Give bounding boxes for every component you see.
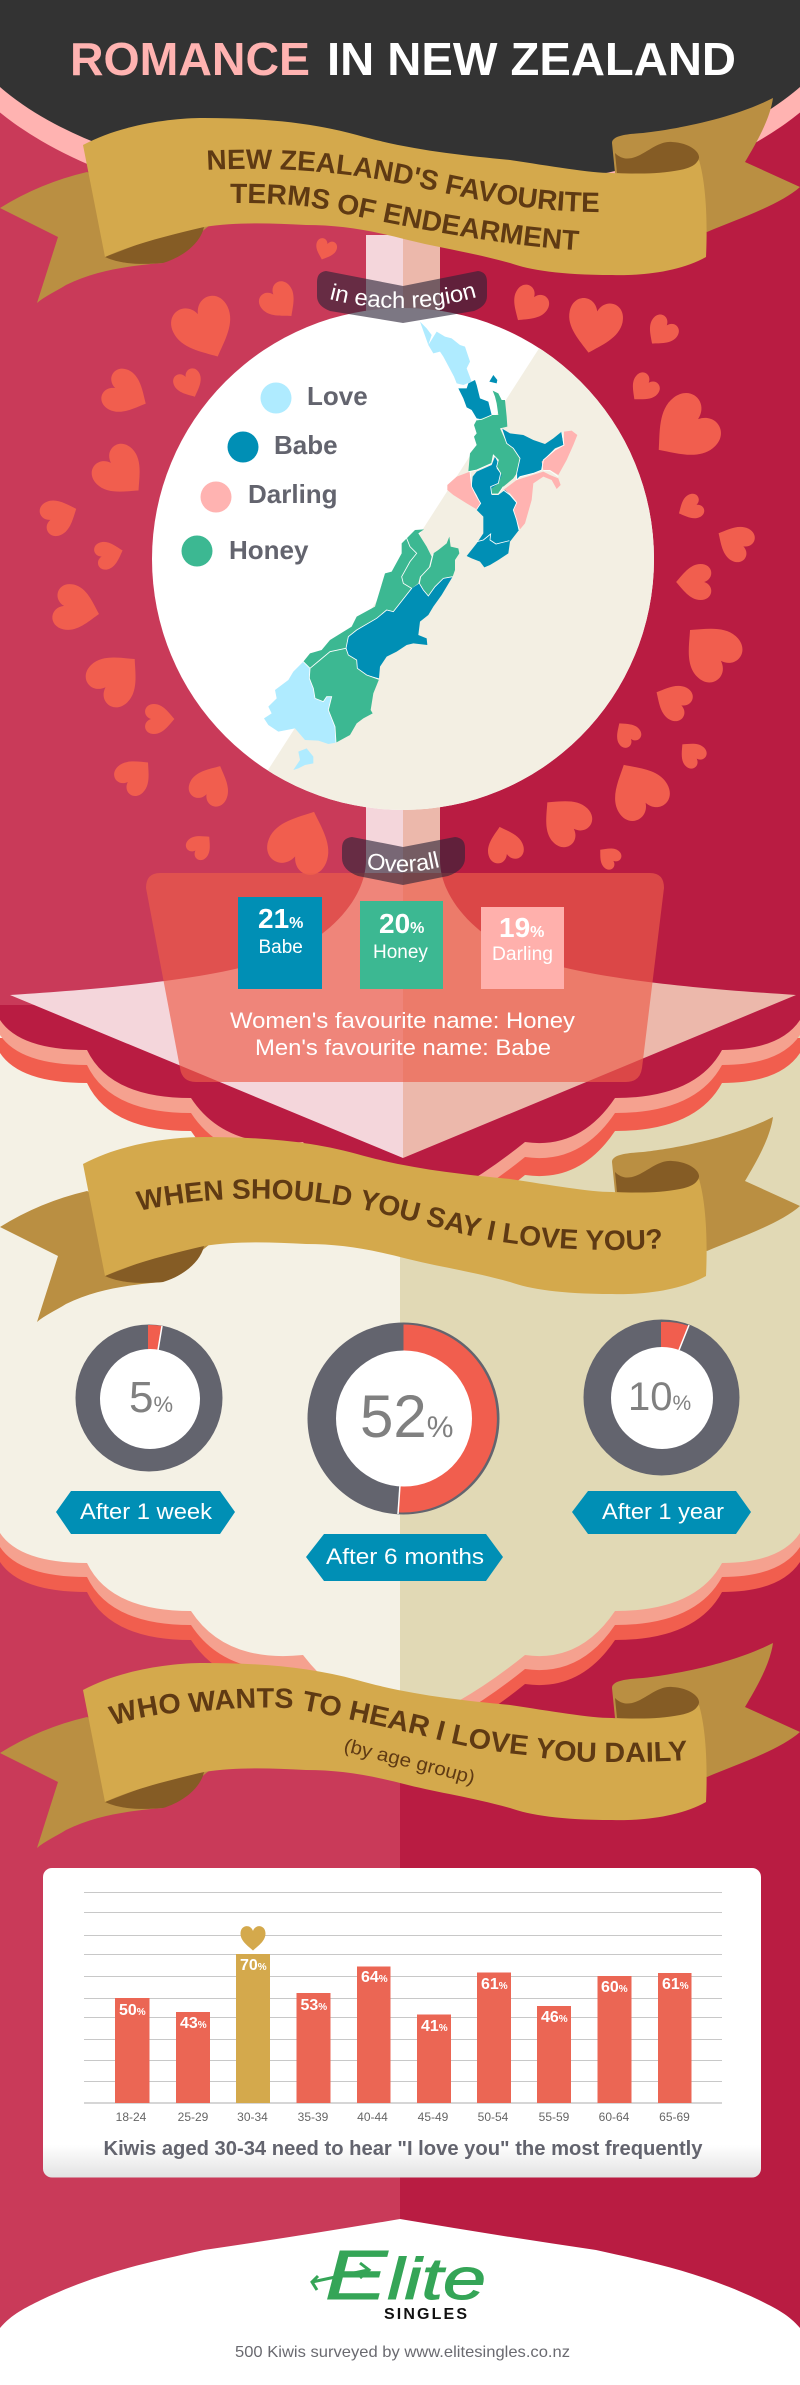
map of New Zealand by region (264, 322, 577, 770)
legend item: Babe (228, 430, 338, 462)
bar chart: by age group: 60% (601, 1979, 628, 1996)
source line: 500 Kiwis surveyed by www.elitesingles.co.nz (235, 2344, 570, 2361)
region: Honey (Marlborough) (419, 537, 459, 596)
legend (182, 381, 368, 566)
footer white cap (0, 2219, 800, 2385)
legend item: Honey: Honey (229, 535, 309, 565)
bar: Darling 19%: Darling (492, 944, 553, 965)
bar: Darling 19% (481, 907, 564, 989)
bar chart: by age group: 25-29 (178, 2110, 209, 2124)
bar chart: by age group: 45-49 (418, 2110, 449, 2124)
region: Darling (East Cape) (542, 431, 577, 475)
bar chart: by age group: 40-44 (357, 2110, 388, 2124)
ribbon heading: who wants to hear I love you daily: (by age group) (344, 1738, 474, 1787)
bar: Honey 20% (360, 901, 443, 989)
bar chart: by age group: 65-69 (659, 2110, 690, 2124)
bar chart: by age group: 55-59 (539, 2110, 570, 2124)
bar: Babe 21% (238, 897, 322, 989)
region: Darling (Hawke's Bay) (503, 472, 561, 529)
bar: Babe 21%: 21% (258, 903, 303, 934)
crimson scalloped edge with coral layers (0, 1005, 800, 1248)
ribbon heading: who wants to hear I love you daily (0, 1643, 800, 1848)
region: Darling (Taranaki) (447, 472, 481, 509)
bar chart: by age group: 53% (300, 1997, 327, 2014)
bar chart: by age group: 64% (361, 1969, 388, 1986)
icon: gold heart above top bar (240, 1926, 266, 1950)
region: Babe (Bay of Plenty) (502, 428, 563, 480)
overall results panel (146, 873, 664, 1082)
bar chart: by age group: 50-54 (478, 2110, 509, 2124)
chart card (43, 1868, 761, 2178)
legend item: Love: Love (307, 381, 368, 411)
ribbon heading: favourite terms of endearment: TERMS OF ENDEARMENT (230, 184, 580, 250)
bar chart: by age group: 61% (662, 1976, 689, 1993)
label: After 1 week (56, 1491, 235, 1534)
region: Babe (lower North Island) (467, 457, 519, 567)
region: Love (Southland) (264, 662, 336, 770)
bar chart: by age group: 30-34 (237, 2110, 268, 2124)
cream scalloped section (0, 1005, 800, 1757)
title (70, 33, 736, 85)
legend item: Love (260, 381, 368, 414)
donut: after 1 week 5%: 5% (129, 1373, 173, 1422)
bar chart: by age group: 61% (481, 1976, 508, 1993)
bar chart: by age group: 46% (541, 2009, 568, 2026)
bar chart: by age group: 50% (119, 2002, 146, 2019)
ribbon heading: favourite terms of endearment (0, 98, 800, 303)
gender favourites text: Men's favourite name: Babe (255, 1035, 551, 1060)
bar: Darling 19%: 19% (499, 912, 544, 943)
header: dark cap with pink rim (0, 0, 800, 222)
ribbon heading: who wants to hear I love you daily: WHO WANTS TO HEAR I LOVE YOU DAILY (108, 1688, 686, 1762)
region: Babe (Canterbury) (346, 577, 453, 678)
title: IN NEW ZEALAND (327, 33, 736, 85)
region: Love (north) (420, 322, 472, 385)
bar: Honey 20%: 20% (379, 908, 424, 939)
chart caption: Kiwis aged 30-34 need to hear "I love you" the most frequently (104, 2138, 703, 2160)
legend item: Babe: Babe (274, 430, 338, 460)
logo: Elite Singles: SINGLES (384, 2306, 467, 2323)
region: Babe (Auckland) (458, 375, 497, 419)
bar chart: by age group: 35-39 (298, 2110, 329, 2124)
tag: in each region: in each region (330, 283, 476, 310)
legend item: Darling: Darling (248, 479, 338, 509)
bar chart: by age group: 60-64 (599, 2110, 630, 2124)
logo: Elite Singles: E lite (325, 2236, 486, 2314)
ribbon heading: when should you say I love you (0, 1117, 800, 1322)
donut: after 6 months 52%: 52% (360, 1383, 453, 1450)
label: After 6 months (306, 1534, 503, 1581)
region: Honey (Otago) (309, 648, 379, 743)
bar chart: by age group (84, 1892, 722, 2124)
tag: Overall (342, 837, 465, 885)
bar: Honey 20%: Honey (373, 942, 428, 963)
ribbon heading: when should you say I love you: WHEN SHOULD YOU SAY I LOVE YOU? (135, 1179, 661, 1250)
donut: after 1 week 5% (76, 1324, 222, 1472)
label: After 1 year: After 1 year (602, 1499, 724, 1524)
label: After 1 week: After 1 week (80, 1499, 213, 1524)
title: ROMANCE (70, 33, 310, 85)
legend item: Honey (182, 535, 309, 566)
label: After 6 months: After 6 months (326, 1544, 484, 1569)
bar: Babe 21%: Babe (258, 937, 303, 958)
region borders (303, 415, 564, 743)
legend item: Darling (200, 479, 338, 512)
bar chart: by age group: 41% (421, 2018, 448, 2035)
gender favourites text: Women's favourite name: Honey (230, 1008, 575, 1033)
tag: in each region (317, 271, 487, 323)
region: Honey (Waikato) (468, 391, 520, 494)
donut: after 6 months 52% (308, 1322, 500, 1514)
bar chart: by age group: 70% (240, 1957, 267, 1974)
donut: after 1 year 10% (584, 1320, 740, 1476)
bar chart: by age group: 18-24 (116, 2110, 147, 2124)
ribbon heading: favourite terms of endearment: NEW ZEALAND'S FAVOURITE (208, 150, 598, 212)
tag: Overall: Overall (368, 851, 439, 872)
vertical band and downward arrow (10, 235, 796, 1158)
bar chart: by age group: 43% (180, 2015, 207, 2032)
donut: after 1 year 10%: 10% (628, 1375, 691, 1419)
gender favourites text (230, 1008, 575, 1060)
region: Honey (West Coast) (303, 538, 417, 668)
map circle (152, 308, 654, 810)
region: Honey (Tasman) (402, 529, 432, 588)
hearts scattered around the map (37, 237, 758, 880)
label: After 1 year (572, 1491, 751, 1534)
